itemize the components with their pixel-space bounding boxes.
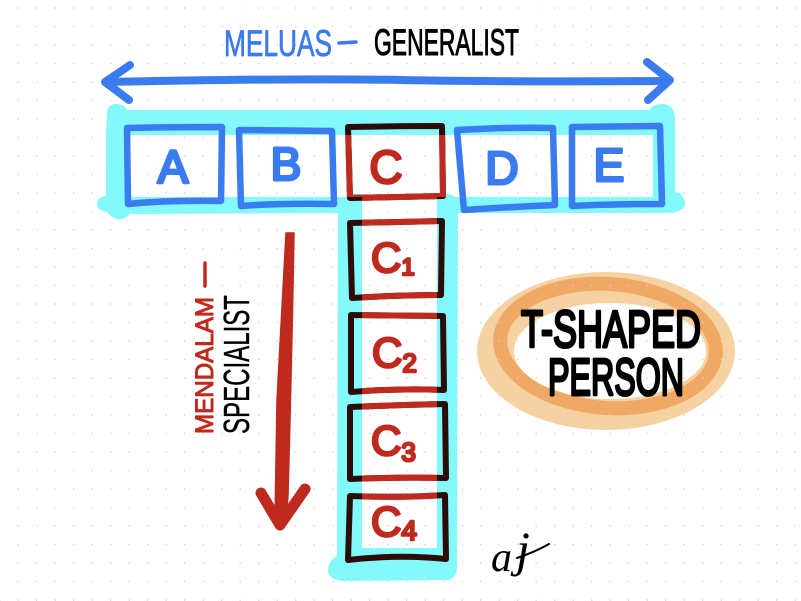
label: t-shaped person	[521, 301, 701, 407]
arrow: vertical red	[261, 233, 305, 525]
box D	[457, 128, 555, 210]
heading: meluas generalist	[224, 22, 519, 64]
label: t-shaped person: PERSON	[548, 349, 684, 407]
cyan T highlight	[97, 104, 685, 581]
box E: E	[594, 139, 624, 191]
signature: j	[510, 521, 530, 577]
box C1	[350, 221, 442, 298]
label: mendalam: MENDALAM	[191, 297, 219, 434]
box A: A	[158, 141, 189, 193]
label: specialist: SPECIALIST	[216, 295, 257, 434]
box C4: 4	[401, 515, 417, 546]
box B: B	[271, 138, 301, 190]
box C1: 1	[401, 254, 415, 281]
signature	[491, 521, 549, 581]
box C2: 2	[402, 348, 417, 378]
box C: C	[369, 141, 403, 193]
box D: D	[485, 142, 519, 194]
box A	[127, 127, 222, 204]
heading: meluas generalist: GENERALIST	[374, 22, 519, 63]
box B	[239, 130, 334, 206]
label: t-shaped person: T-SHAPED	[521, 301, 701, 359]
box E	[572, 126, 662, 206]
box C2: C	[372, 329, 402, 376]
box C3: C	[371, 417, 401, 464]
box C4	[348, 495, 446, 560]
box C	[348, 126, 443, 198]
box C1: C	[371, 234, 401, 281]
arrow: horizontal blue	[105, 62, 670, 100]
orange ellipse highlight	[477, 272, 735, 430]
signature: a	[491, 535, 512, 581]
box C3	[350, 404, 446, 479]
box C4: C	[371, 498, 401, 545]
box C2	[351, 315, 444, 392]
heading: meluas generalist: MELUAS	[224, 23, 332, 64]
box C3: 3	[401, 437, 416, 467]
